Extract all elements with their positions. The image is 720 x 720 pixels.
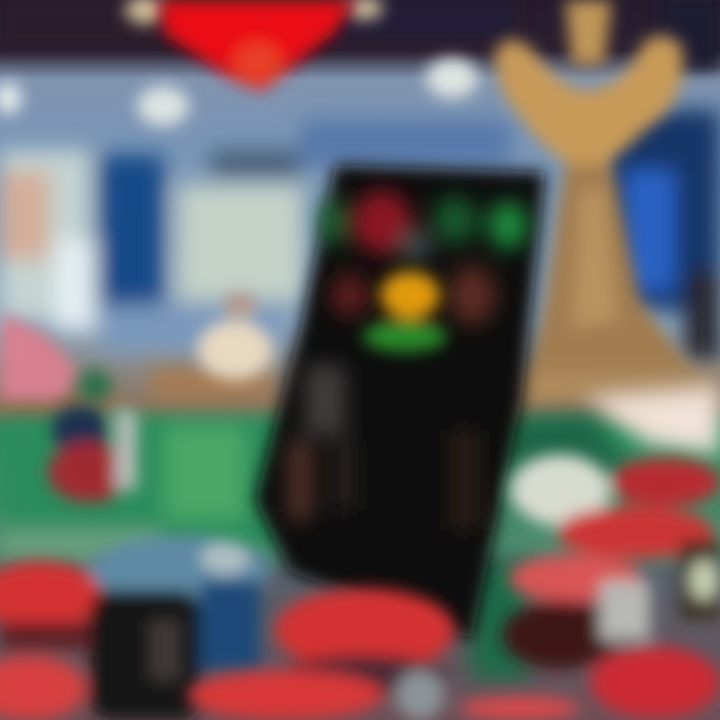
table edge and cream surface	[0, 368, 720, 455]
pink dome and lamp	[0, 293, 273, 400]
poker chips: left	[0, 535, 270, 720]
phone screen text blur	[288, 365, 480, 530]
poker chips: right	[502, 454, 720, 718]
red diamond sign	[160, 0, 355, 90]
phone logo centre	[363, 271, 447, 352]
phone screen logo	[320, 190, 528, 325]
phone body	[255, 165, 545, 640]
ceiling: dark band	[0, 0, 720, 70]
smartphone	[255, 165, 545, 640]
figure on table	[48, 369, 137, 502]
ceiling lights	[0, 0, 478, 126]
poker chips: center	[187, 588, 580, 720]
golden trophy	[495, 0, 695, 395]
green table felt	[0, 415, 630, 680]
wall: panels and columns	[0, 110, 720, 360]
